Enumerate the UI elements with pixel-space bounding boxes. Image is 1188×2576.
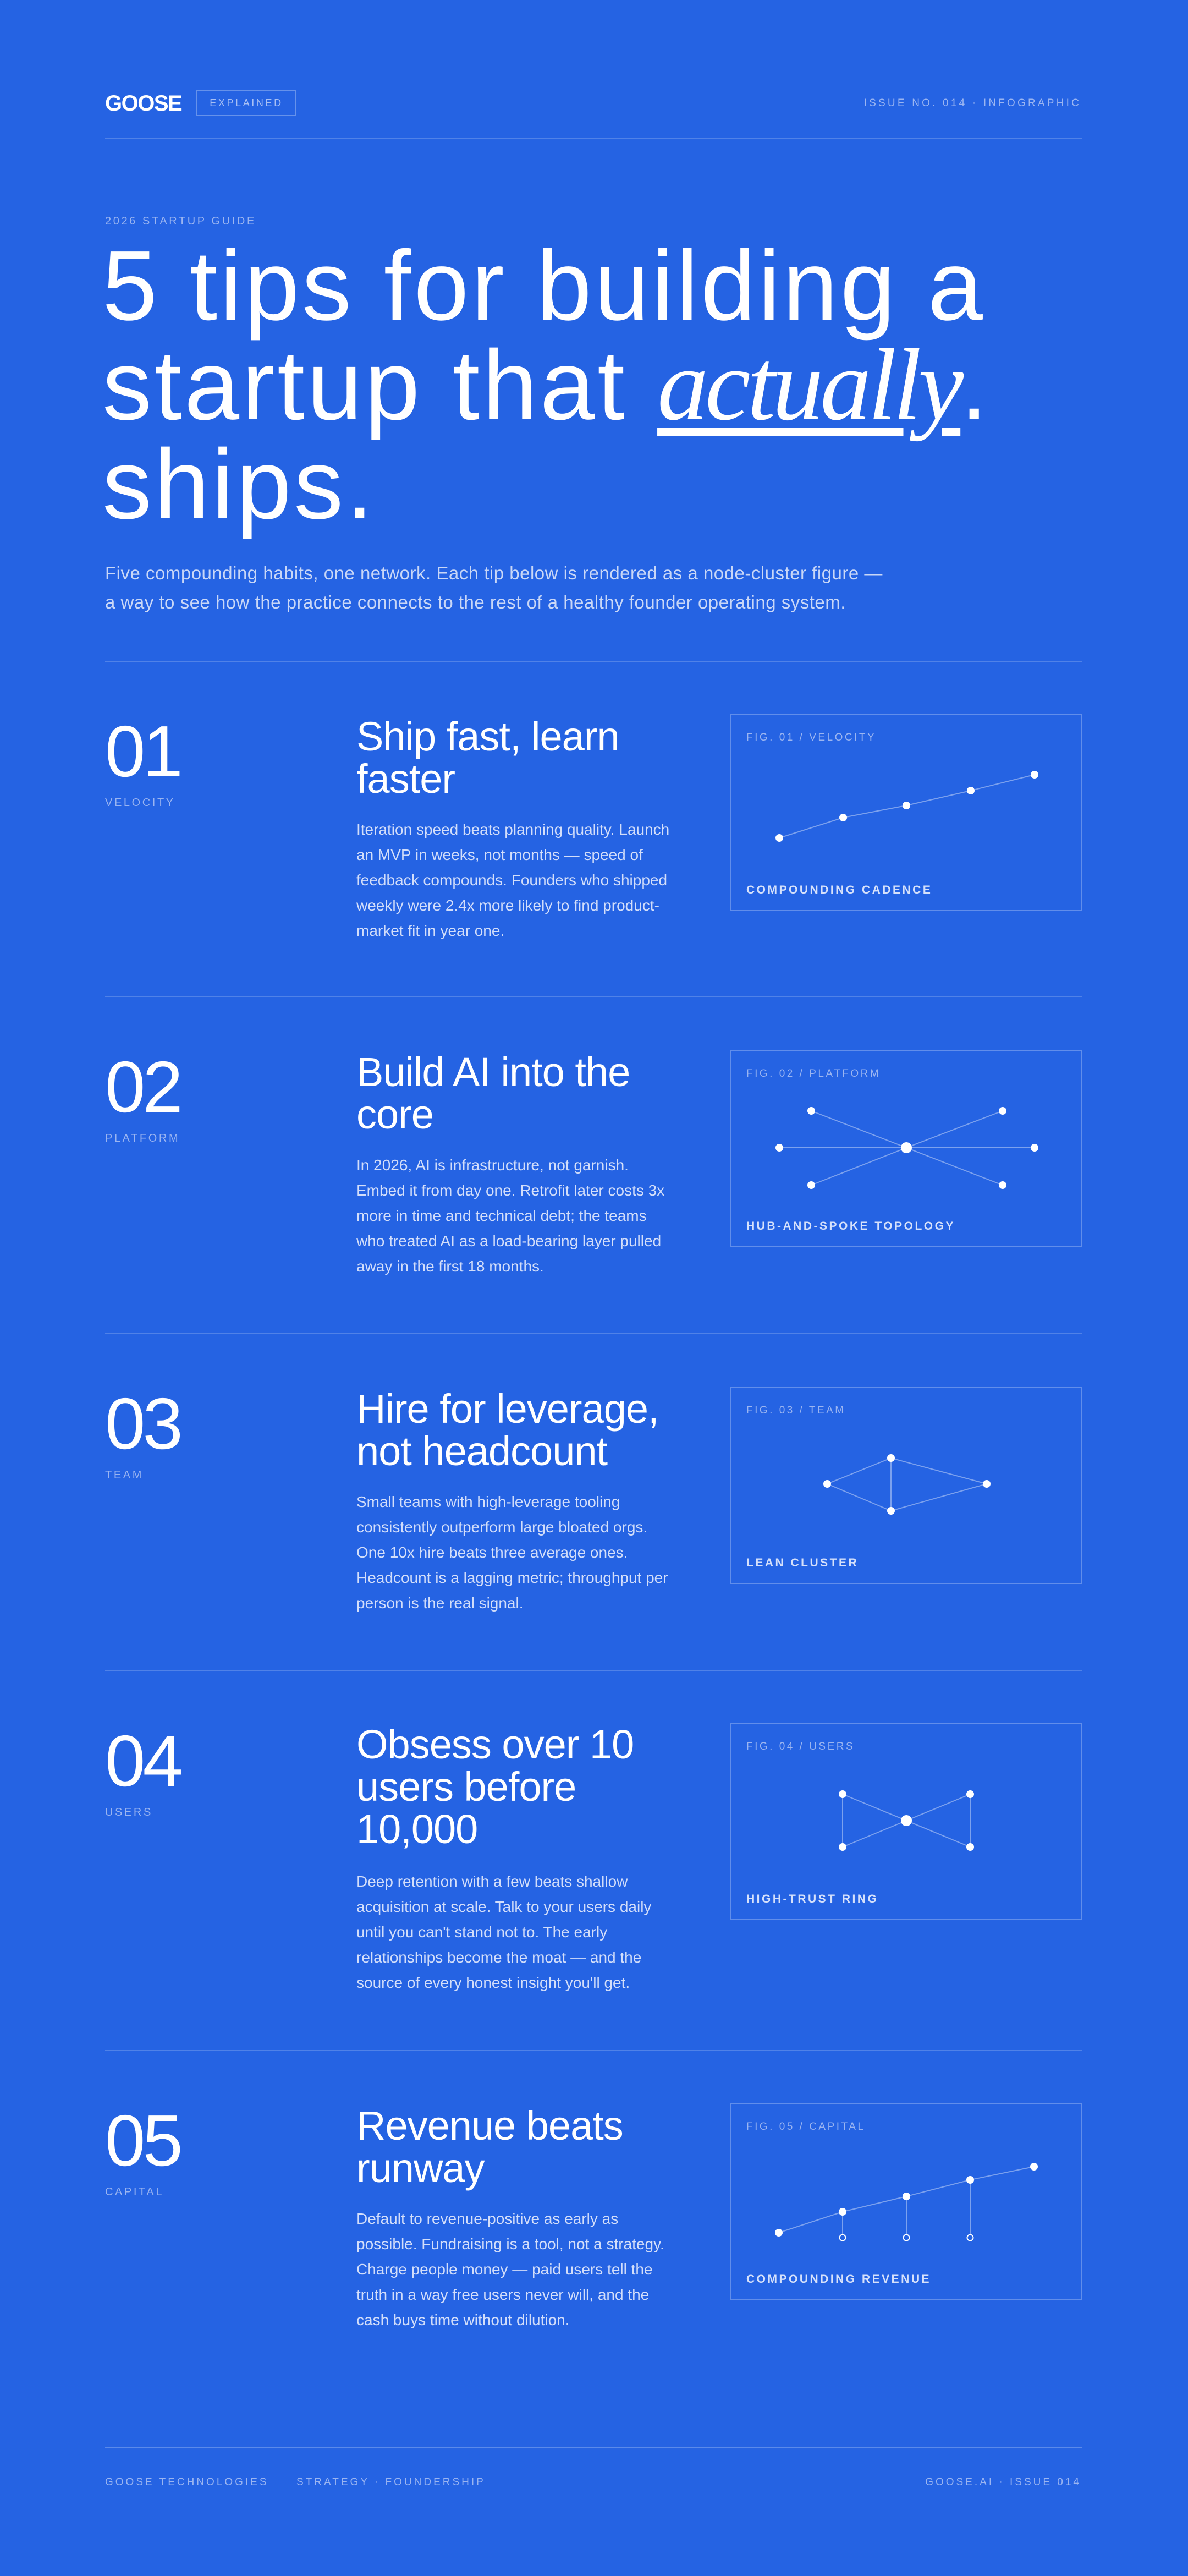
body 04: acquisition at scale. Talk to your users daily	[356, 1898, 651, 1915]
header: logo: GOOSE	[105, 91, 182, 116]
body 01	[356, 821, 669, 939]
footer middle: STRATEGY · FOUNDERSHIP	[296, 2476, 486, 2488]
figure 03	[730, 1387, 1082, 1584]
label platform: PLATFORM	[105, 1132, 180, 1144]
heading 03: Hire for leverage,	[356, 1386, 659, 1432]
chart: lean cluster	[823, 1454, 991, 1515]
footer left: GOOSE TECHNOLOGIES	[105, 2476, 269, 2488]
heading 05: runway	[356, 2145, 485, 2191]
body 01: feedback compounds. Founders who shipped	[356, 872, 667, 889]
body 03: Small teams with high-leverage tooling	[356, 1493, 620, 1510]
body 03: Headcount is a lagging metric; throughput per	[356, 1569, 668, 1586]
eyebrow: 2026 STARTUP GUIDE	[105, 215, 256, 227]
label velocity: VELOCITY	[105, 797, 175, 809]
heading 01: faster	[356, 756, 455, 802]
heading 04: Obsess over 10	[356, 1722, 634, 1767]
footer right: GOOSE.AI · ISSUE 014	[925, 2476, 1081, 2488]
header: logo	[105, 90, 296, 116]
body 03	[356, 1493, 668, 1612]
figure 03: FIG. 03 / TEAM	[746, 1405, 846, 1416]
number 05: 05	[105, 2100, 180, 2181]
label team: TEAM	[105, 1469, 144, 1481]
body 05: possible. Fundraising is a tool, not a strategy.	[356, 2235, 664, 2252]
label users: USERS	[105, 1806, 153, 1818]
chart: compounding cadence	[776, 771, 1038, 842]
chart: high-trust ring	[839, 1790, 974, 1851]
chart: compounding revenue	[775, 2163, 1038, 2241]
figure 03: LEAN CLUSTER	[746, 1556, 859, 1569]
figure 04	[730, 1723, 1082, 1920]
badge: explained	[196, 90, 296, 116]
body 01: weekly were 2.4x more likely to find product-	[356, 897, 659, 914]
body 04	[356, 1873, 651, 1991]
body 05: Default to revenue-positive as early as	[356, 2210, 618, 2227]
body 01: market fit in year one.	[356, 922, 504, 939]
title: ships.	[102, 429, 376, 540]
body 05: Charge people money — paid users tell the	[356, 2261, 653, 2278]
body 04: source of every honest insight you'll get.	[356, 1974, 630, 1991]
number 01: 01	[105, 711, 180, 792]
body 02: who treated AI as a load-bearing layer pulled	[356, 1232, 661, 1249]
body 05	[356, 2210, 664, 2328]
heading 05: Revenue beats	[356, 2103, 623, 2149]
title: 5 tips for building a	[102, 231, 985, 341]
badge: explained: EXPLAINED	[210, 97, 283, 108]
number 03: 03	[105, 1383, 180, 1464]
heading 01	[356, 714, 619, 802]
subtitle: a way to see how the practice connects to the rest of a healthy founder operating system.	[105, 592, 846, 612]
number 02: 02	[105, 1046, 180, 1127]
body 05: cash buys time without dilution.	[356, 2311, 570, 2328]
body 03: One 10x hire beats three average ones.	[356, 1544, 628, 1561]
body 02: Embed it from day one. Retrofit later costs 3x	[356, 1182, 664, 1199]
chart: hub and spoke	[776, 1107, 1038, 1189]
title	[102, 231, 991, 540]
subtitle: Five compounding habits, one network. Each tip below is rendered as a node-cluster figure —	[105, 563, 883, 583]
title: startup that actually.	[102, 328, 991, 442]
figure 04: HIGH-TRUST RING	[746, 1893, 878, 1905]
heading 05	[356, 2103, 623, 2191]
figure 05: COMPOUNDING REVENUE	[746, 2273, 931, 2285]
figure 05	[730, 2103, 1082, 2300]
heading 03	[356, 1386, 659, 1474]
label capital: CAPITAL	[105, 2186, 164, 2198]
figure 01: COMPOUNDING CADENCE	[746, 884, 932, 896]
heading 02: Build AI into the	[356, 1049, 630, 1095]
figure 02	[730, 1050, 1082, 1247]
body 01: Iteration speed beats planning quality. Launch	[356, 821, 669, 838]
header: issue: ISSUE NO. 014 · INFOGRAPHIC	[864, 97, 1081, 109]
body 01: an MVP in weeks, not months — speed of	[356, 846, 643, 863]
heading 04: 10,000	[356, 1806, 477, 1852]
body 04: until you can't stand not to. The early	[356, 1923, 607, 1941]
number 04: 04	[105, 1720, 180, 1801]
figure 02: FIG. 02 / PLATFORM	[746, 1068, 881, 1079]
body 03: consistently outperform large bloated orgs.	[356, 1519, 647, 1536]
figure 01: FIG. 01 / VELOCITY	[746, 732, 876, 743]
heading 02: core	[356, 1092, 433, 1137]
body 02: more in time and technical debt; the teams	[356, 1207, 647, 1224]
figure 01	[730, 714, 1082, 911]
heading 04	[356, 1722, 634, 1852]
subtitle	[105, 563, 883, 612]
body 02	[356, 1157, 664, 1275]
body 02: away in the first 18 months.	[356, 1258, 544, 1275]
heading 04: users before	[356, 1764, 576, 1810]
heading 01: Ship fast, learn	[356, 714, 619, 759]
body 02: In 2026, AI is infrastructure, not garnish.	[356, 1157, 629, 1174]
body 04: Deep retention with a few beats shallow	[356, 1873, 628, 1890]
figure 02: HUB-AND-SPOKE TOPOLOGY	[746, 1220, 955, 1232]
body 05: truth in a way free users never will, and the	[356, 2286, 649, 2303]
heading 02	[356, 1049, 630, 1137]
figure 04: FIG. 04 / USERS	[746, 1741, 855, 1752]
figure 05: FIG. 05 / CAPITAL	[746, 2121, 865, 2133]
body 04: relationships become the moat — and the	[356, 1949, 641, 1966]
heading 03: not headcount	[356, 1428, 607, 1474]
body 03: person is the real signal.	[356, 1594, 524, 1612]
